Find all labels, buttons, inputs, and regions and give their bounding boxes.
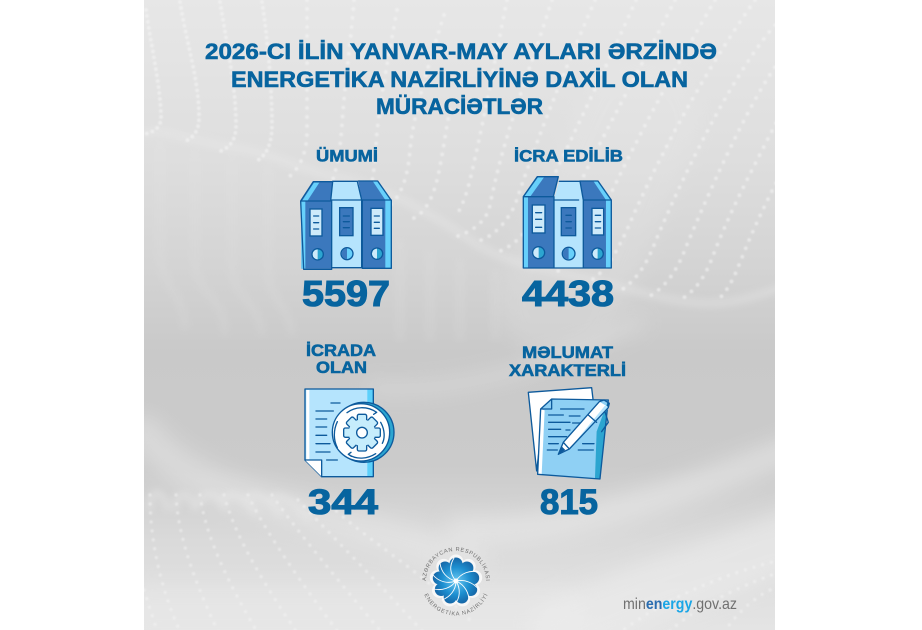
icon: binders total [301,181,391,269]
logo: ministry emblem: AZƏRBAYCAN RESPUBLİKASI [422,547,490,581]
title: MÜRACİƏTLƏR [376,94,543,119]
value: 815: 815 [540,483,598,522]
title [205,39,717,119]
dotted wave bottom [144,495,780,630]
icon: document with gear [305,389,394,477]
title: 2026-CI İLİN YANVAR-MAY AYLARI ƏRZİNDƏ [205,39,717,64]
icon: binders completed [523,177,611,268]
infographic canvas [144,0,775,630]
dotted wave top [144,0,780,300]
value: 4438: 4438 [522,273,614,314]
value: 344: 344 [308,483,379,522]
icon: note with pen [528,388,609,479]
heading: məlumat xarakterli: MƏLUMAT [522,343,614,362]
value: 5597: 5597 [302,273,390,314]
heading: icrada olan: İCRADA [306,341,376,360]
heading: icra edilib: İCRA EDİLİB [514,146,623,166]
heading: icrada olan: OLAN [316,358,367,377]
heading: məlumat xarakterli [509,343,626,380]
website url: minenergy.gov.az [623,596,737,613]
logo: ministry emblem: ENERGETİKA NAZİRLİYİ [424,593,488,616]
heading: icrada olan [306,341,376,377]
panel: icrada olan [305,341,394,522]
panel: məlumat xarakterli [509,343,626,522]
panel: ümumi [301,146,391,314]
title: ENERGETİKA NAZİRLİYİNƏ DAXİL OLAN [231,67,688,92]
background panel [144,0,790,630]
logo: ministry emblem [422,547,490,616]
heading: məlumat xarakterli: XARAKTERLİ [509,361,626,380]
heading: ümumi: ÜMUMİ [316,146,378,166]
panel: icra edilib [514,146,623,314]
